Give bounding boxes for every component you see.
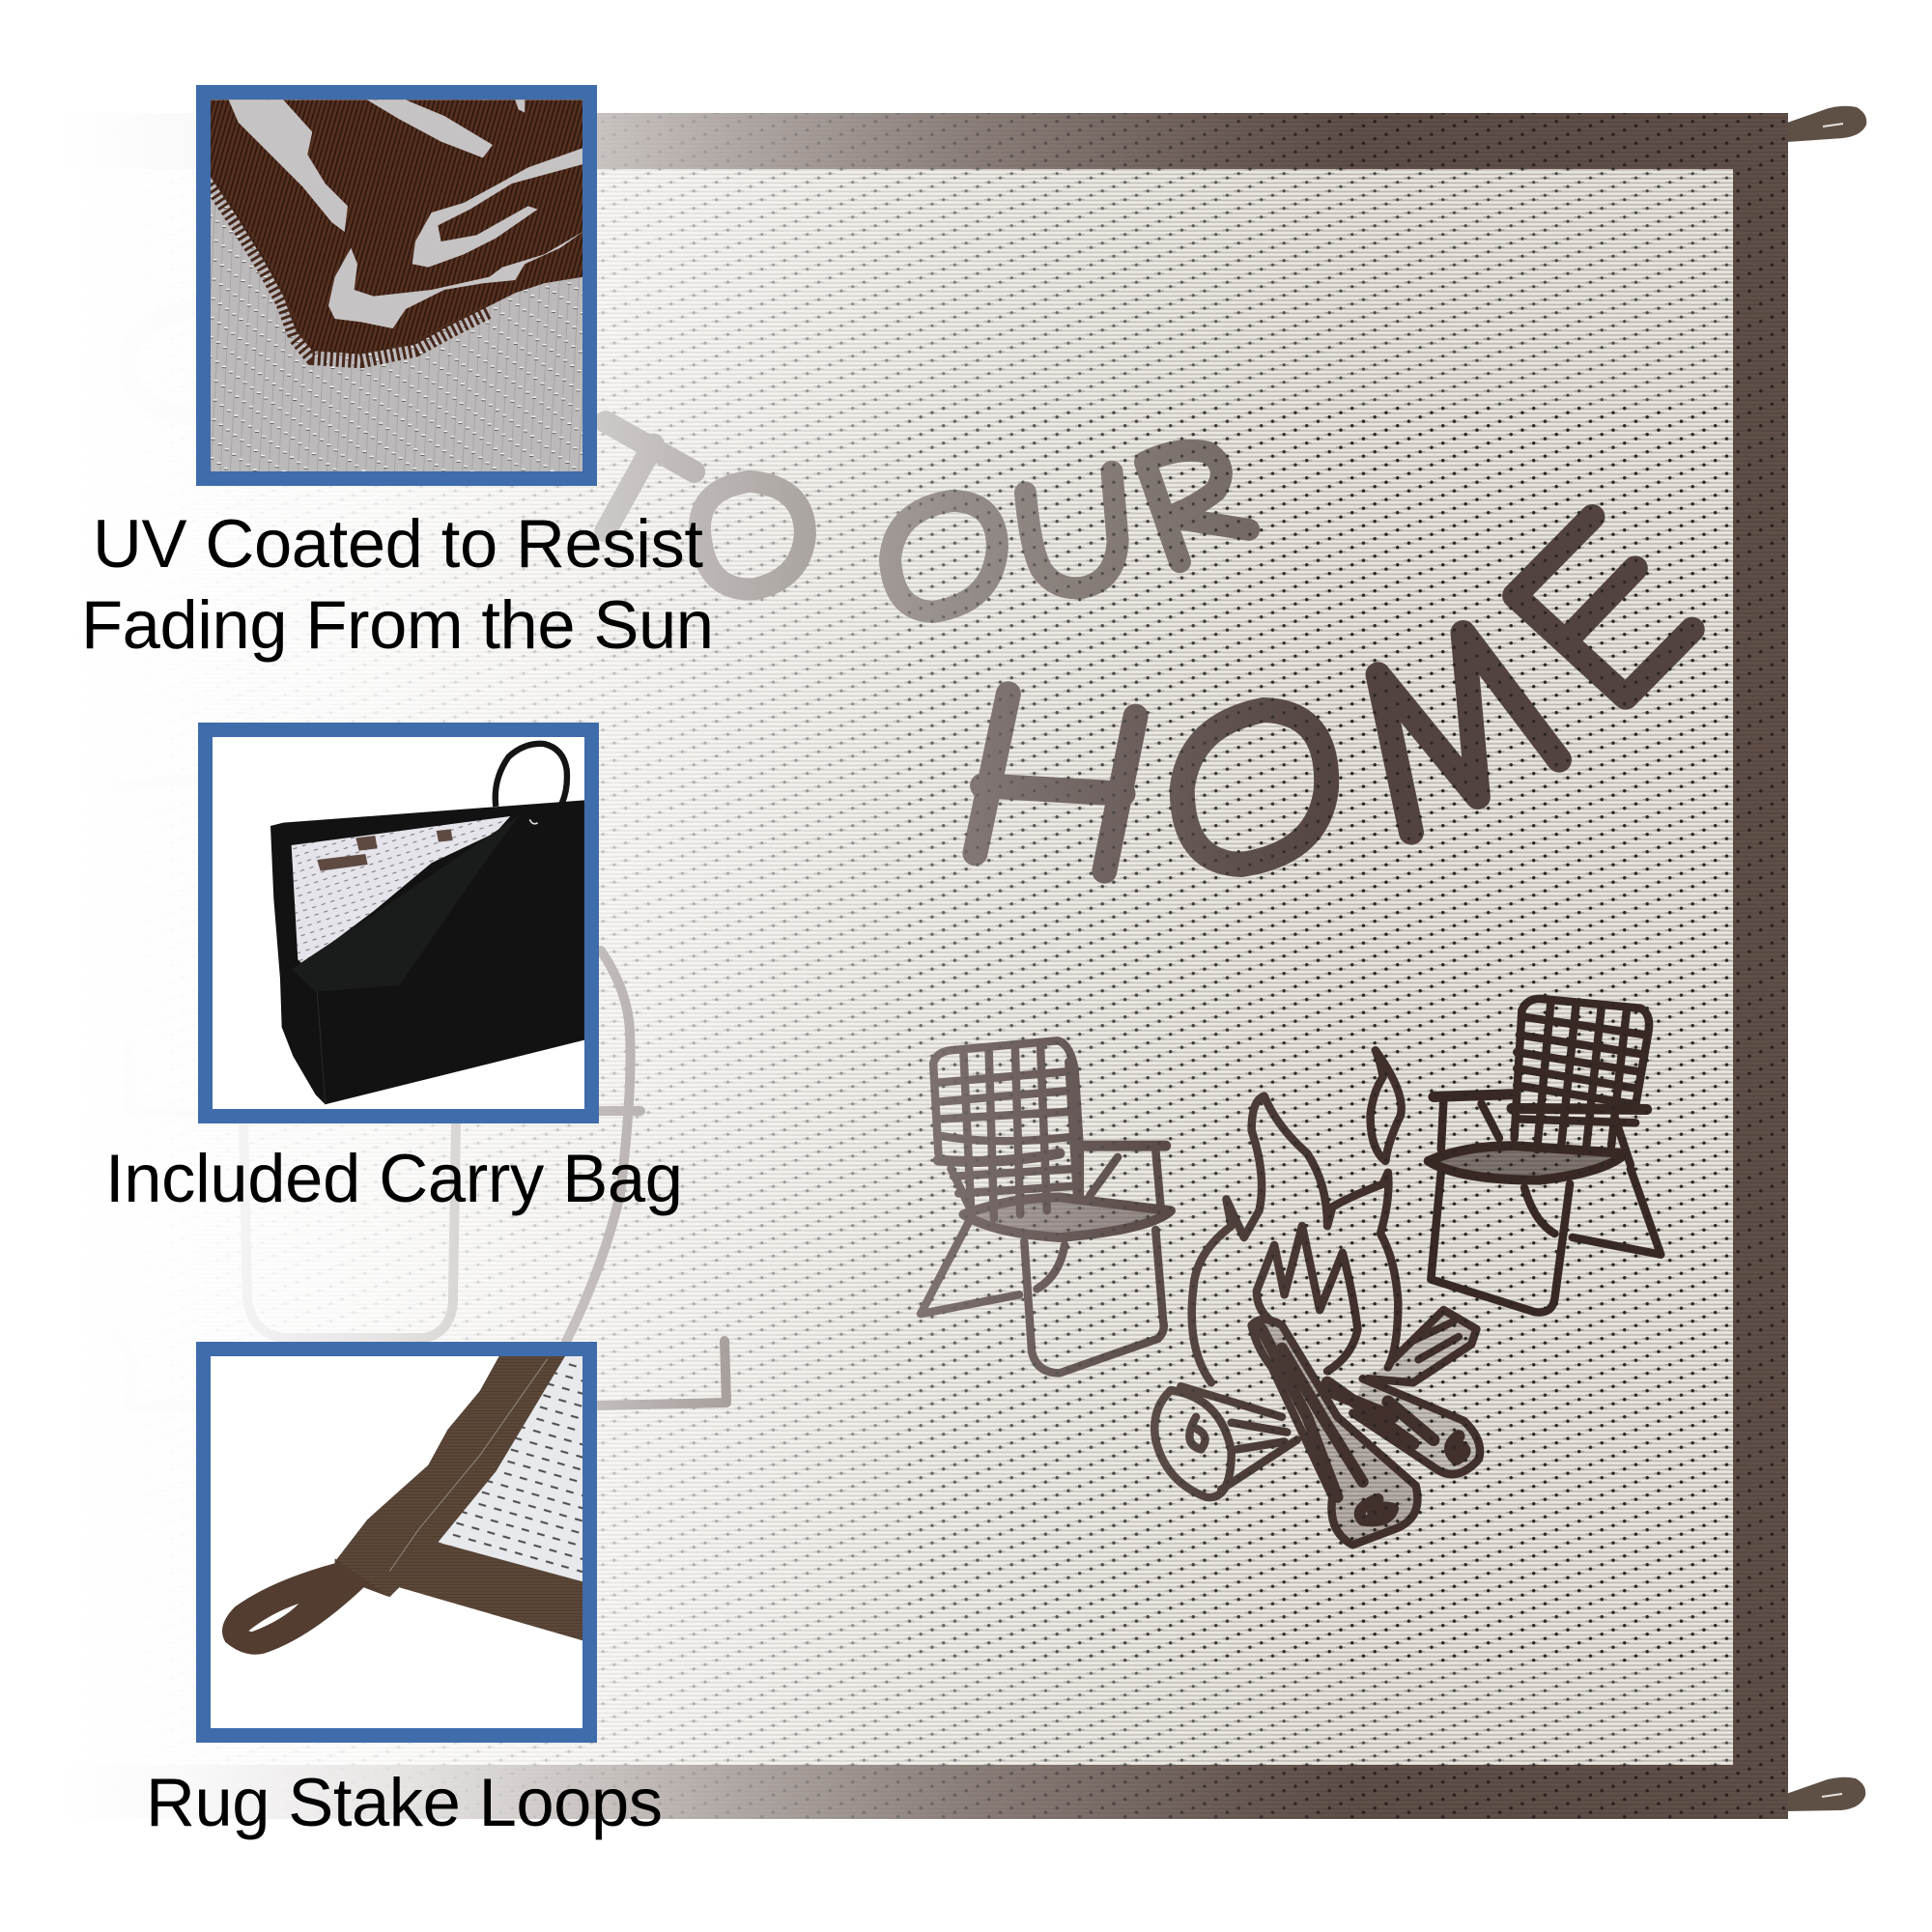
illustration: campfire [1154,1050,1480,1545]
lettering: TO OUR [606,422,1249,611]
carry bag photo [270,744,584,1104]
log left [1154,1390,1232,1497]
letter R [1145,450,1249,562]
bag handle [496,744,567,807]
lettering: HOME [975,517,1692,871]
caption: UV coated [81,505,714,663]
loop [222,1558,389,1655]
letter O [699,481,805,589]
letter O [890,500,997,611]
rug stake loop top [1787,106,1866,142]
panel: UV coated close-up [196,85,597,486]
zip flap [292,814,520,992]
rug border [58,113,1788,1819]
illustration: folding chair left [921,1040,1171,1373]
folded rug inside [292,816,510,964]
rug corner and loop photo [222,1356,582,1655]
panel frame [196,85,597,486]
log back [1368,1310,1476,1382]
outer flame [1192,1096,1398,1382]
letter M [1378,633,1559,833]
bag body [270,800,584,1104]
spark flame [1371,1050,1402,1161]
rug field [58,169,1733,1765]
ghost artwork: faded welcome lettering and chair [84,307,726,1407]
rug field corner [435,1356,582,1587]
binding [335,1356,582,1640]
caption: UV coated: UV Coated to Resist [93,505,703,582]
stitching [389,1359,548,1572]
letter H [975,694,1136,871]
illustration: folding chair right [1429,999,1661,1312]
caption: UV coated: Fading From the Sun [81,586,714,663]
panel: carry bag [198,723,599,1123]
fade overlay [53,108,1357,1824]
weave dots over artwork [908,406,1733,1662]
caption: stake loops: Rug Stake Loops [146,1764,663,1840]
letter U [1025,471,1118,588]
letter O [1182,710,1326,865]
letter T [606,422,695,531]
panel: stake loops [196,1342,597,1743]
rug stake loop bottom [1786,1777,1865,1811]
log right [1352,1378,1480,1474]
panel frame [198,723,599,1123]
woven rug close-up photo [211,99,582,471]
letter E [1515,517,1692,697]
inner flame [1257,1226,1357,1371]
panel frame [196,1342,597,1743]
caption: carry bag: Included Carry Bag [105,1140,683,1216]
log centre [1252,1320,1417,1545]
